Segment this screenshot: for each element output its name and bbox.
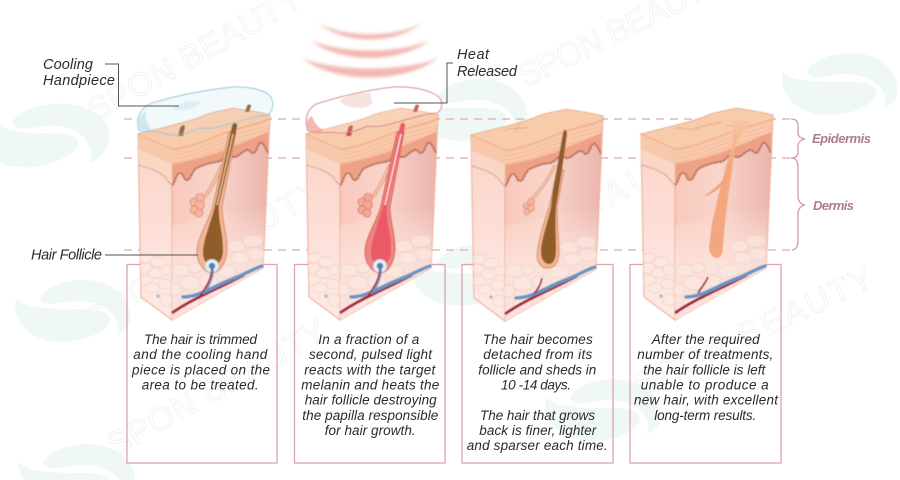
- panel: step 2 box: [294, 264, 445, 463]
- text: step 1 description: The hair is trimmed: [144, 332, 257, 347]
- skin block 2 with heated hair: [306, 104, 438, 320]
- text: step 4 description: new hair, with excellent: [634, 392, 779, 408]
- text: step 2 description: second, pulsed light: [309, 347, 433, 362]
- text: step 2 description: the papilla responsible: [302, 408, 438, 423]
- text: step 4 description: the hair follicle is left: [643, 362, 767, 378]
- label: hair follicle: Hair Follicle: [31, 248, 102, 264]
- watermark text: SPON BEAUTY: [627, 259, 879, 402]
- label: heat released: [394, 47, 518, 103]
- dashed level guides: [124, 119, 795, 250]
- text: step 4 description: After the required: [651, 332, 760, 347]
- cooling handpiece outline: [138, 87, 273, 135]
- text: step 4 description: [634, 332, 779, 423]
- heated handpiece glass behind skin: [306, 87, 442, 134]
- panel: step 4 box: [630, 264, 781, 463]
- panel: step 3 box: [462, 264, 613, 463]
- watermark text: SPON BEAUTY: [100, 312, 333, 463]
- label: cooling handpiece: Handpiece: [43, 73, 115, 89]
- text: step 3 description: back is finer, lighter: [479, 423, 597, 438]
- text: step 2 description: hair follicle destroying: [305, 392, 437, 408]
- bracket: dermis: Dermis: [813, 198, 854, 213]
- label: heat released: Released: [457, 64, 518, 80]
- text: step 2 description: In a fraction of a: [318, 332, 420, 347]
- bracket: dermis: [791, 158, 854, 250]
- text: step 3 description: and sparser each time.: [467, 438, 608, 453]
- text: step 3 description: The hair that grows: [480, 408, 595, 423]
- text: step 1 description: area to be treated.: [142, 378, 259, 392]
- bracket: epidermis: Epidermis: [812, 131, 871, 146]
- text: step 3 description: detached from its: [483, 347, 593, 362]
- skin block 3 with detached hair: [471, 109, 603, 321]
- text: step 4 description: long-term results.: [654, 408, 756, 423]
- text: step 3 description: follicle and sheds in: [478, 362, 596, 378]
- bracket: epidermis: [791, 119, 871, 158]
- text: step 3 description: [467, 332, 608, 453]
- text: step 4 description: unable to produce a: [641, 378, 769, 392]
- watermark text: SPON BEAUTY: [436, 132, 705, 298]
- label: cooling handpiece: Cooling: [43, 57, 93, 73]
- text: step 4 description: number of treatments,: [637, 347, 773, 362]
- skin block 4 with inactive follicle: [641, 108, 773, 320]
- text: step 1 description: piece is placed on the: [131, 362, 270, 378]
- heat waves: [302, 23, 438, 78]
- label: heat released: Heat: [457, 47, 490, 63]
- text: step 3 description: 10 -14 days.: [501, 378, 571, 392]
- watermark text: SPON BEAUTY: [77, 171, 329, 338]
- cooling handpiece glass behind skin: [138, 87, 273, 135]
- text: step 1 description: [131, 332, 270, 392]
- text: step 3 description: The hair becomes: [483, 332, 593, 347]
- text: step 2 description: for hair growth.: [325, 423, 416, 438]
- heated handpiece outline: [306, 87, 442, 133]
- text: step 2 description: melanin and heats the: [301, 378, 439, 392]
- panel: step 1 box: [127, 264, 277, 463]
- label: cooling handpiece: [43, 57, 179, 106]
- text: step 2 description: [301, 332, 439, 438]
- text: step 2 description: reacts with the target: [304, 362, 437, 378]
- text: step 1 description: and the cooling hand: [133, 347, 268, 362]
- skin block 1 with trimmed hair: [138, 104, 270, 320]
